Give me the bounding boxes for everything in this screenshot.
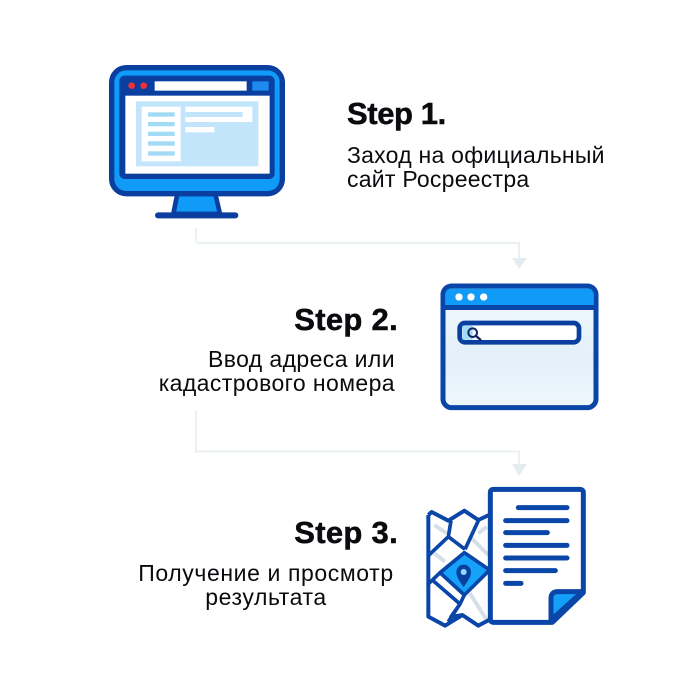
text: step 1 description [347, 142, 605, 192]
window frame [443, 286, 596, 408]
text: step 3 description [138, 560, 394, 610]
title bar [443, 289, 596, 310]
icon: computer monitor [112, 68, 282, 218]
text: step 1 description: сайт Росреестра [347, 166, 529, 192]
heading: step 2: Step 2. [294, 302, 398, 337]
text: step 1 description: Заход на официальный [347, 142, 605, 168]
icon: map and document [428, 489, 583, 626]
heading: step 3: Step 3. [294, 515, 398, 550]
monitor body [112, 68, 282, 194]
document [490, 489, 583, 622]
text: step 2 description [159, 346, 395, 396]
search box [460, 323, 579, 342]
text: step 3 description: Получение и просмотр [138, 560, 394, 586]
text: step 2 description: Ввод адреса или [208, 346, 395, 372]
heading: step 1: Step 1. [347, 96, 446, 131]
text: step 3 description: результата [205, 584, 327, 610]
arrow: step 1 to step 2 [196, 228, 527, 269]
screen [119, 76, 275, 179]
text: step 2 description: кадастрового номера [159, 370, 395, 396]
arrow: step 2 to step 3 [196, 411, 527, 476]
map [428, 511, 490, 626]
icon: browser search window [443, 286, 596, 408]
monitor stand [155, 194, 238, 218]
